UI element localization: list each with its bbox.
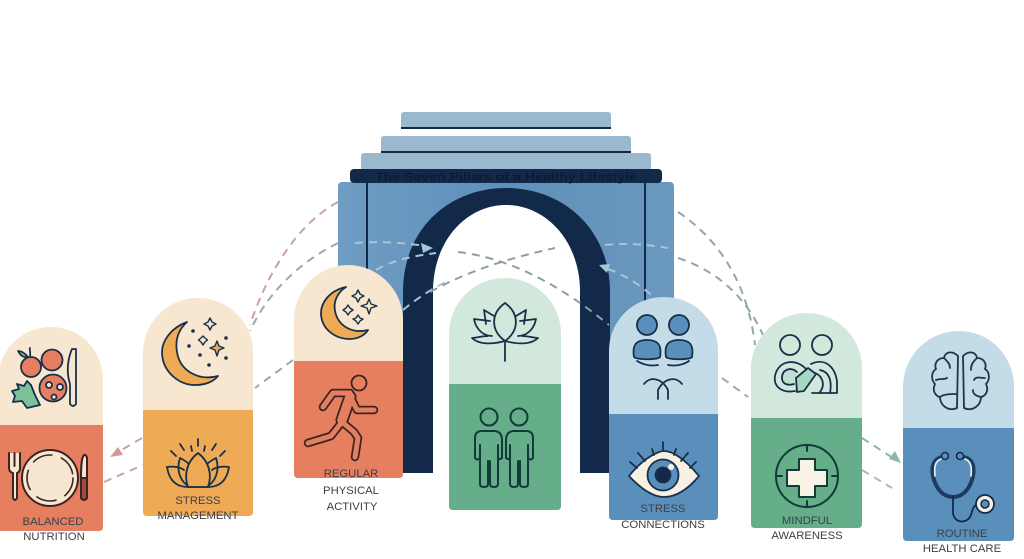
icon: crescent moon and stars [321,287,377,339]
pillar: balanced nutrition [0,327,103,543]
pillar: regular physical activity [294,265,403,513]
label: MANAGEMENT [158,510,239,522]
label: HEALTH CARE [923,543,1002,555]
icon: medical cross [776,445,838,507]
label [158,495,239,522]
icon: moon and stars [162,318,228,385]
icon: plate and cutlery [9,450,87,506]
label [323,468,379,513]
icon: stethoscope [932,452,994,521]
label: STRESS [175,495,221,507]
label: ACTIVITY [327,501,378,513]
label: CONNECTIONS [621,519,705,531]
label: REGULAR [324,468,378,480]
icon: brain [932,352,989,409]
lintel with title: The Seven Pillars of a Healthy Lifestyle [375,172,637,184]
dashed connector arrows [104,202,901,488]
label: ROUTINE [937,528,988,540]
icon: two busts and joined arcs [634,315,692,399]
label [923,528,1002,555]
label: STRESS [640,503,686,515]
roof steps [361,112,651,171]
label [771,515,843,542]
label: PHYSICAL [323,485,379,497]
label: AWARENESS [771,530,843,542]
icon: food and knife [12,348,76,408]
label: MINDFUL [782,515,832,527]
icon: lotus [167,439,229,487]
label: NUTRITION [23,531,85,543]
pillar: mindful awareness [751,313,862,542]
label [621,503,705,531]
icon: lotus flower [472,303,538,361]
lintel with title [350,169,662,184]
label: BALANCED [23,516,83,528]
icon: clasped hands [775,335,837,393]
pillar: green centre [449,278,561,510]
arch wall [338,182,674,342]
pillar: routine health care [903,331,1014,555]
pillar: stress management [143,298,253,522]
icon: eye [629,442,699,497]
icon: runner [308,376,374,457]
label [23,516,85,543]
arch opening [403,188,610,473]
arch monument [338,112,674,473]
pillar: stress connections [609,297,718,531]
icon: two people [475,408,533,487]
